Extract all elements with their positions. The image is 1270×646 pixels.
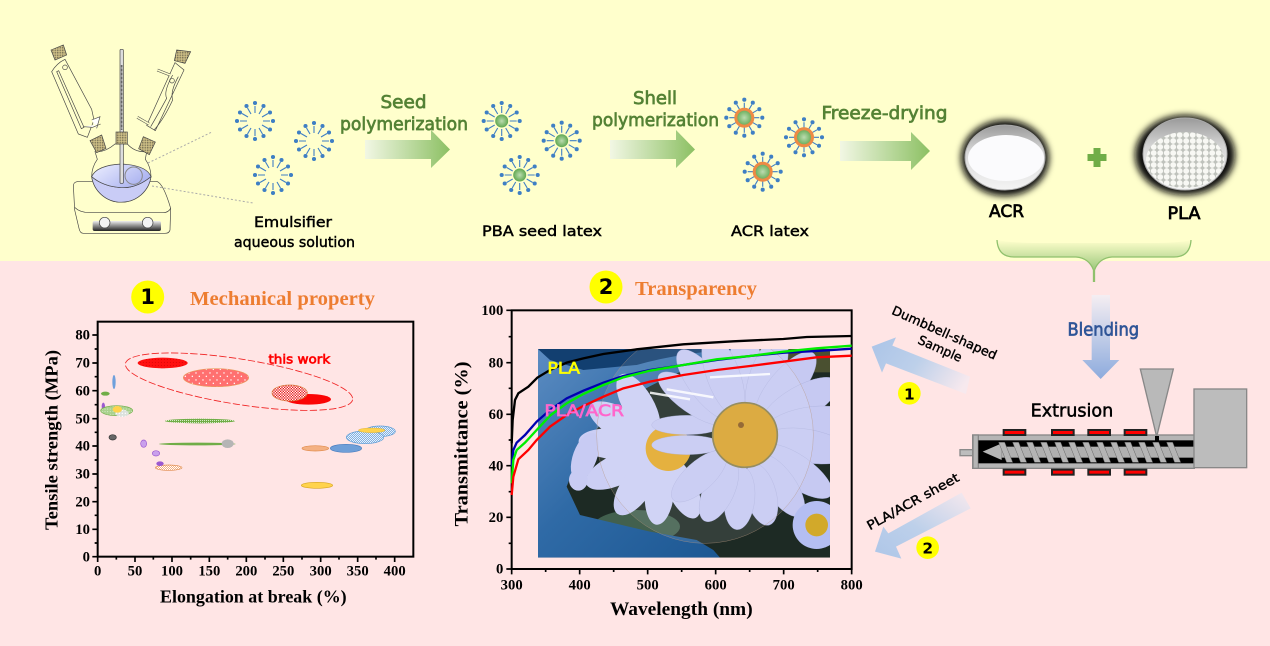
panel: synthesis background: [0, 0, 1270, 261]
x axis labels: 250: [272, 564, 294, 580]
axis ticks: [92, 335, 395, 562]
arrow: to dumbbell-shaped sample: [872, 337, 970, 394]
label: PLA/ACR: PLA/ACR: [544, 401, 624, 420]
label: PLA/ACR sheet: PLA/ACR sheet: [864, 470, 962, 533]
x axis labels: 200: [235, 564, 257, 580]
x axis labels: 800: [841, 578, 863, 594]
curve: red: [512, 356, 852, 495]
arrow: freeze-drying: [840, 132, 930, 170]
small daisy: [792, 501, 830, 549]
plot frame: [98, 322, 413, 557]
icon: PLA petri dish: [1135, 115, 1235, 195]
badge: 2: 2: [922, 540, 933, 558]
y axis labels: 60: [75, 383, 90, 399]
x axis labels: 700: [773, 578, 795, 594]
label: shell polymerization: polymerization: [592, 110, 719, 131]
label: freeze-drying: Freeze-drying: [822, 103, 948, 124]
label: PLA: PLA: [547, 358, 580, 377]
bracket joining ACR and PLA: [997, 240, 1191, 282]
arrow: blending: [1082, 295, 1119, 379]
icon: plus sign: [1088, 148, 1106, 167]
x axis labels: 350: [347, 564, 369, 580]
x axis labels: 400: [384, 564, 406, 580]
icon: reaction flask on hot plate: [51, 45, 191, 233]
curve: PLA black: [512, 336, 852, 443]
y axis labels: 0: [496, 562, 503, 578]
arrow: to PLA/ACR sheet: [875, 493, 971, 559]
back daisy: [578, 374, 700, 525]
icon: PBA seed latex particles: [482, 102, 581, 194]
extrusion and output section: [864, 295, 1247, 559]
label: dumbbell-shaped sample: Dumbbell-shaped: [890, 303, 999, 362]
heading: mechanical property: 1: [140, 285, 155, 309]
label: ACR: ACR: [989, 202, 1024, 222]
y axis labels: 60: [489, 407, 503, 423]
label: emulsifier aqueous solution: Emulsifier: [254, 215, 332, 231]
y axis labels: 50: [75, 411, 90, 427]
y axis labels: 10: [75, 522, 90, 538]
label: shell polymerization: Shell: [633, 88, 677, 109]
label: emulsifier aqueous solution: aqueous solution: [234, 235, 355, 251]
y axis labels: 100: [481, 303, 503, 319]
label: seed polymerization: Seed: [380, 92, 426, 113]
dashed ellipse: this work group: [122, 341, 356, 422]
label: PBA seed latex: PBA seed latex: [482, 224, 602, 240]
badge: 1: 1: [904, 385, 915, 403]
badge: 2: [916, 536, 939, 559]
y axis labels: [75, 328, 90, 565]
plot frame: [512, 310, 852, 569]
label: dumbbell-shaped sample: Sample: [916, 332, 965, 365]
y axis labels: [481, 303, 503, 578]
icon: ACR petri dish: [961, 120, 1049, 196]
y axis labels: 80: [75, 328, 90, 344]
film disc: [597, 327, 813, 543]
axis ticks: [506, 310, 852, 574]
label: blending: Blending: [1067, 321, 1139, 341]
icon: emulsifier micelles: [236, 102, 334, 194]
label: ACR latex: ACR latex: [731, 224, 809, 240]
curve: blue: [512, 349, 852, 467]
axis title: elongation: Elongation at break (%): [160, 587, 347, 608]
heading: transparency: 2: [599, 275, 613, 299]
y axis labels: 20: [75, 494, 90, 510]
label: seed polymerization: polymerization: [340, 114, 468, 135]
x axis labels: 300: [501, 578, 523, 594]
badge: 1: [898, 382, 921, 405]
arrow: seed polymerization: [365, 130, 450, 168]
label: emulsifier aqueous solution: [234, 215, 355, 251]
x axis labels: 300: [310, 564, 332, 580]
y axis labels: 40: [489, 458, 503, 474]
pointer lines from flask to emulsifier: [148, 132, 253, 203]
x axis labels: 600: [705, 578, 727, 594]
x axis labels: 500: [637, 578, 659, 594]
main daisy: [652, 349, 830, 530]
axis title: tensile strength: Tensile strength (MPa): [41, 350, 62, 530]
glove: [538, 349, 750, 558]
y axis labels: 80: [489, 355, 503, 371]
icon: ACR latex particles: [725, 98, 824, 191]
heading: transparency: [590, 270, 757, 304]
x axis labels: [501, 578, 863, 594]
axis title: transmittance: Transmittance (%): [451, 361, 472, 526]
label: extrusion: Extrusion: [1031, 402, 1113, 422]
y axis labels: 30: [75, 467, 90, 483]
arrow: shell polymerization: [610, 130, 695, 168]
photo: daisy seen through PLA/ACR film: [538, 349, 830, 558]
panel: properties background: [0, 261, 1270, 646]
x axis labels: 100: [161, 564, 183, 580]
icon: screw extruder: [960, 369, 1247, 475]
data ellipses: [101, 358, 395, 488]
y axis labels: 70: [75, 356, 90, 372]
chart: transmittance vs wavelength: [451, 303, 863, 620]
heading: mechanical property: [131, 280, 375, 314]
chart: tensile strength vs elongation: [41, 322, 413, 608]
heading: transparency: Transparency: [635, 278, 757, 300]
y axis labels: 40: [75, 439, 90, 455]
side petals left: [569, 442, 598, 491]
x axis labels: 50: [128, 564, 142, 580]
axis title: wavelength: Wavelength (nm): [610, 599, 753, 620]
label: shell polymerization: [592, 88, 719, 131]
heading: mechanical property: Mechanical property: [190, 288, 375, 310]
y axis labels: 20: [489, 510, 503, 526]
label: seed polymerization: [340, 92, 468, 135]
y axis labels: 0: [83, 549, 90, 565]
x axis labels: 0: [94, 564, 101, 580]
curve: green: [512, 346, 852, 483]
label: this work: this work: [268, 351, 331, 366]
label: PLA: PLA: [1168, 204, 1201, 224]
x axis labels: [94, 564, 406, 580]
x axis labels: 150: [198, 564, 220, 580]
x axis labels: 400: [569, 578, 591, 594]
